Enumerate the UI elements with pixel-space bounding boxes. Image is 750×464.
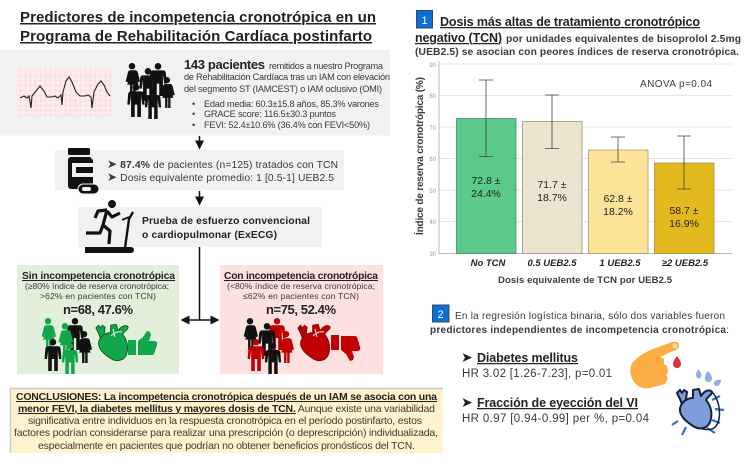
text: patients summary: • — [192, 109, 195, 119]
text: conclusions: especialmente en pacientes que podrían no obtener beneficios pronósticos del TCN. — [38, 440, 415, 452]
y axis tick labels: 70 — [429, 126, 437, 132]
text: conclusions — [14, 391, 438, 452]
text: conclusions: significativa entre individuos en la respuesta cronotrópica en el período postinfarto, estos — [28, 415, 422, 427]
arrow: treatment to test — [198, 191, 200, 204]
bar: 0.5 UEB2.5 — [522, 95, 582, 254]
y axis title: Índice de reserva cronotrópica (%) — [413, 77, 426, 235]
text: patients summary: remitidos a nuestro Programa — [269, 61, 384, 71]
panel: treatment — [55, 148, 344, 194]
panel: with chronotropic incompetence — [220, 265, 383, 374]
bar: at least 2 UEB2.5: 58.7 ± — [669, 205, 699, 217]
heading: dose finding: negativo (TCN) — [415, 31, 502, 45]
chart grid and axes — [439, 61, 732, 254]
panel: conclusions — [10, 388, 443, 453]
text: criteria: (≥80% índice de reserva cronotrópica; — [25, 281, 169, 291]
icon: finger with blood drop — [630, 342, 681, 388]
text: treatment details: ➤ 87.4% de pacientes (n=125) tratados con TCN — [107, 157, 338, 171]
y axis tick labels: 40 — [429, 220, 437, 226]
y axis tick labels: 90 — [429, 63, 437, 69]
panel: without chronotropic incompetence — [17, 265, 179, 374]
text: group size: n=75, 52.4% — [266, 302, 336, 317]
panel: study population — [0, 50, 390, 136]
text: patients summary — [184, 57, 390, 130]
text: logistic regression intro: En la regresión logística binaria, sólo dos variables fueron — [455, 311, 725, 322]
y axis tick labels: 50 — [429, 189, 437, 195]
y axis tick labels: 80 — [429, 94, 437, 100]
bar: 1 UEB2.5 — [588, 137, 648, 254]
text: predictor ejection fraction — [461, 394, 650, 425]
text: patients summary: • — [192, 120, 195, 130]
x axis category labels — [471, 258, 709, 269]
icon: group of patients — [126, 63, 175, 119]
arrow: split to outcome groups — [182, 247, 218, 320]
bar: No TCN — [456, 80, 516, 254]
title: Programa de Rehabilitación Cardíaca postinfarto — [20, 28, 372, 45]
text: exercise test label: o cardiopulmonar (ExECG) — [142, 230, 277, 241]
text: predictor ejection fraction: HR 0.97 [0.94-0.99] per %, p=0.04 — [462, 413, 650, 425]
title: Predictores de incompetencia cronotrópica en un — [20, 9, 376, 26]
badge: number 2 — [432, 305, 449, 322]
text: conclusions: factores podrían considerarse para realizar una prescripción (o deprescripción) individualizada, — [14, 427, 438, 439]
x axis category labels: 0.5 UEB2.5 — [527, 258, 577, 269]
text: patients summary: del segmento ST (IAMCEST) o IAM oclusivo (OMI) — [184, 84, 382, 94]
heading: group with incompetence: Con incompetencia cronotrópica — [224, 271, 378, 282]
badge: number 1 — [416, 10, 432, 28]
text: patients summary: FEVI: 52.4±10.6% (36.4% con FEVI<50%) — [204, 120, 370, 130]
text: patients summary: GRACE score: 116.5±30.3 puntos — [204, 109, 336, 119]
y axis tick labels — [429, 63, 437, 258]
bar: No TCN: 24.4% — [471, 188, 501, 200]
icon: red heart — [298, 324, 330, 361]
x axis title: Dosis equivalente de TCN por UEB2.5 — [498, 275, 673, 286]
heading: dose finding: Dosis más altas de tratamiento cronotrópico — [440, 15, 700, 29]
icon: green patients — [42, 318, 92, 374]
text: treatment details — [107, 157, 338, 184]
title — [20, 9, 376, 45]
x axis category labels: 1 UEB2.5 — [599, 258, 641, 269]
icon: runner on treadmill — [85, 200, 134, 253]
heading: dose finding — [415, 15, 741, 58]
text: treatment details: ➤ Dosis equivalente promedio: 1 [0.5-1] UEB2.5 — [107, 170, 334, 184]
text: patients summary: • — [192, 99, 195, 109]
text: predictor diabetes: HR 3.02 [1.26-7.23], p=0.01 — [462, 368, 612, 380]
bar: 1 UEB2.5: 62.8 ± — [603, 193, 633, 205]
text: predictor ejection fraction: ➤ — [461, 394, 473, 410]
icon: green heart — [96, 324, 128, 361]
text: criteria: (<80% índice de reserva cronotrópica; — [227, 281, 375, 291]
text: conclusions: menor FEVI, la diabetes mellitus y mayores dosis de TCN. Aunque existe una variabilidad — [18, 403, 435, 415]
text: exercise test label: Prueba de esfuerzo convencional — [142, 216, 310, 227]
icon: red patients — [244, 318, 294, 374]
panel: exercise test — [78, 200, 322, 253]
text: group size: n=68, 47.6% — [63, 302, 133, 317]
bar: No TCN: 72.8 ± — [471, 175, 501, 187]
heading: group without incompetence: Sin incompetencia cronotrópica — [22, 271, 175, 282]
text: exercise test label — [142, 216, 310, 241]
x axis category labels: No TCN — [471, 258, 507, 269]
ANOVA annotation: ANOVA p=0.04 — [640, 79, 712, 90]
bar: at least 2 UEB2.5 — [654, 136, 714, 254]
icon: ECG strip — [17, 68, 113, 116]
badge: number 2: 2 — [437, 309, 444, 321]
text: criteria: >62% en pacientes con TCN) — [40, 291, 156, 301]
text: conclusions: CONCLUSIONES: La incompetencia cronotrópica después de un IAM se asocia con una — [16, 391, 437, 403]
text: criteria — [25, 281, 169, 301]
bar: 0.5 UEB2.5: 71.7 ± — [537, 179, 567, 191]
text: criteria — [227, 281, 375, 301]
bar: at least 2 UEB2.5: 16.9% — [669, 218, 699, 230]
icon: heart with sweat drops — [672, 369, 724, 435]
icon: thumb down — [331, 335, 360, 361]
text: logistic regression intro — [430, 311, 729, 336]
icon: thumb up — [128, 331, 157, 355]
text: criteria: ≤62% en pacientes con TCN) — [243, 291, 359, 301]
bar chart: chronotropic reserve by dose — [413, 61, 732, 286]
text: patients summary: 143 pacientes — [184, 57, 265, 72]
text: logistic regression intro: predictores independientes de incompetencia cronotrópica: — [430, 325, 729, 336]
heading: dose finding: (UEB2.5) se asocian con peores índices de reserva cronotrópica. — [415, 47, 739, 58]
text: predictor diabetes: Diabetes mellitus — [477, 351, 578, 365]
heading: dose finding: por unidades equivalentes de bisoprolol 2.5mg — [506, 34, 741, 45]
badge: number 1: 1 — [421, 15, 428, 27]
bar: 1 UEB2.5: 18.2% — [603, 206, 633, 218]
x axis category labels: ≥2 UEB2.5 — [662, 258, 709, 269]
y axis tick labels: 30 — [429, 252, 437, 258]
icon: pill bottle — [68, 148, 99, 194]
arrow: population to treatment — [198, 136, 200, 148]
text: predictor diabetes: ➤ — [461, 349, 473, 365]
y axis tick labels: 60 — [429, 157, 437, 163]
text: patients summary: Edad media: 60.3±15.8 años, 85.3% varones — [204, 99, 379, 109]
bar: 0.5 UEB2.5: 18.7% — [537, 192, 567, 204]
text: patients summary: de Rehabilitación Cardíaca tras un IAM con elevación — [184, 72, 390, 82]
text: predictor ejection fraction: Fracción de eyección del VI — [477, 396, 638, 410]
text: predictor diabetes — [461, 349, 612, 380]
